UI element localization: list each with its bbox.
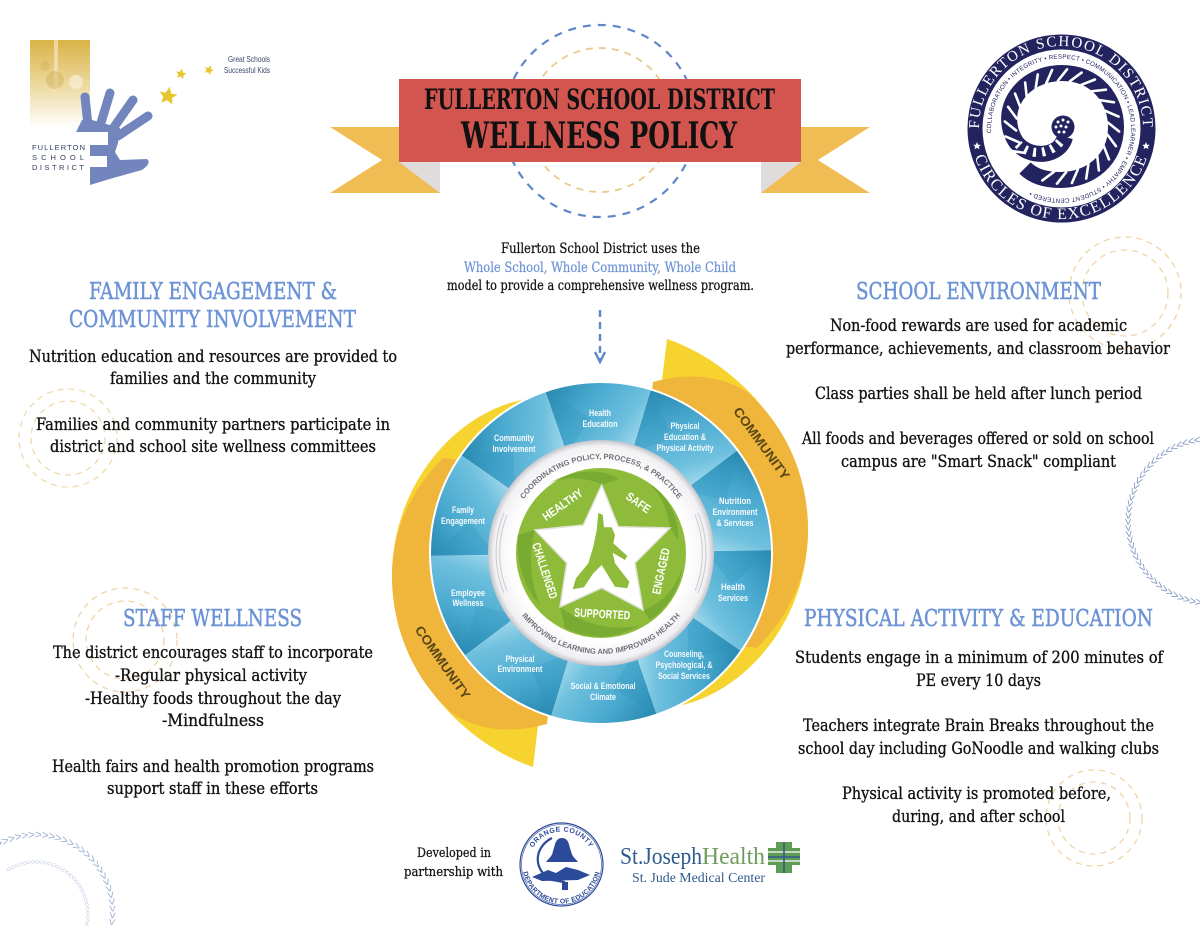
logo: Fullerton School District hand: [30, 40, 270, 185]
logo: St. Joseph Health St. Jude Medical Center: [620, 842, 800, 886]
decorative chevron arcs: >>>>>>>>>>>>>>>>>>>>>>>>>>>>>>: [6, 860, 90, 926]
green star medallion: HEALTHY: [540, 486, 586, 524]
text: staff wellness body: -Regular physical activity: [115, 666, 307, 686]
heading: school environment: SCHOOL ENVIRONMENT: [856, 279, 1102, 305]
chart: whole school whole community whole child wheel: [392, 339, 808, 767]
wheel segment labels: Community: [494, 433, 535, 444]
logo: Fullerton School District hand: DISTRICT: [32, 163, 84, 172]
wheel segment labels: Social Services: [658, 671, 710, 682]
panel: school environment: [786, 279, 1171, 472]
logo: Orange County Department of Education seal: ORANGE COUNTY: [530, 826, 594, 847]
text: family engagement body: [29, 347, 397, 457]
community label: lower left: COMMUNITY: [412, 623, 474, 702]
text: family engagement body: Families and community partners participate in: [36, 415, 390, 435]
partnership text: Developed in: [417, 846, 492, 861]
green star medallion: CHALLENGED: [529, 541, 560, 601]
wheel segment labels: Environment: [712, 507, 758, 518]
text: family engagement body: families and the community: [110, 369, 316, 389]
wheel segment labels: Health: [589, 408, 611, 419]
text: physical activity body: Physical activity is promoted before,: [842, 784, 1111, 804]
community swoosh: lower left: [392, 399, 560, 767]
wheel segment labels: Family: [452, 505, 475, 516]
white inner ring with curved captions: COORDINATING POLICY, PROCESS, & PRACTICE: [520, 454, 682, 500]
jumping figure: [573, 513, 629, 589]
wheel segment labels: Involvement: [492, 444, 536, 455]
panel: family engagement and community involvement: [29, 279, 397, 457]
logo: Circles of Excellence seal: FULLERTON SCHOOL DISTRICT: [969, 36, 1153, 128]
wheel segment labels: Environment: [498, 664, 543, 675]
text: school environment body: Class parties shall be held after lunch period: [815, 384, 1142, 404]
green star medallion: SUPPORTED: [574, 606, 631, 622]
wheel segment labels: Education: [582, 419, 618, 430]
text: school environment body: [786, 316, 1171, 472]
title line 1: FULLERTON SCHOOL DISTRICT: [424, 83, 775, 116]
logo: Fullerton School District hand: Successful Kids: [224, 65, 270, 75]
white inner ring with curved captions: [488, 440, 714, 666]
wheel segment labels: Education &: [664, 432, 706, 443]
green star medallion: SAFE: [623, 489, 653, 516]
text: staff wellness body: support staff in these efforts: [107, 779, 318, 799]
wheel segments: [420, 380, 782, 726]
logo: Fullerton School District hand: SCHOOL: [32, 153, 84, 162]
heading: family engagement: [69, 279, 357, 333]
wheel segment labels: Engagement: [441, 516, 486, 527]
wheel segment labels: [441, 408, 758, 703]
partnership text: [404, 846, 504, 880]
wheel segment labels: Employee: [451, 588, 485, 599]
partnership text: partnership with: [404, 865, 504, 880]
text: staff wellness body: The district encourages staff to incorporate: [53, 643, 373, 663]
heading: staff wellness: STAFF WELLNESS: [123, 606, 302, 632]
logo: Orange County Department of Education seal: [519, 822, 604, 907]
text: family engagement body: Nutrition education and resources are provided to: [29, 347, 397, 367]
intro text block: Whole School, Whole Community, Whole Child: [464, 260, 736, 276]
logo: Circles of Excellence seal: COLLABORATION • INTEGRITY • RESPECT • COMMUNICATION • LEAD LEARNER • EMPATHY • STUDENT CENTERED •: [986, 54, 1136, 203]
text: staff wellness body: [52, 643, 374, 799]
heading: family engagement: COMMUNITY INVOLVEMENT: [69, 307, 357, 333]
wheel segment labels: Physical: [506, 654, 534, 665]
text: family engagement body: district and school site wellness committees: [50, 437, 376, 457]
intro text block: [447, 241, 754, 294]
text: physical activity body: during, and after school: [892, 807, 1065, 827]
wheel segment labels: Psychological, &: [656, 660, 713, 671]
wheel segment labels: Physical Activity: [656, 443, 714, 454]
logo: Circles of Excellence seal: [968, 34, 1156, 222]
text: school environment body: Non-food rewards are used for academic: [830, 316, 1127, 336]
wheel segment labels: Counseling,: [664, 649, 704, 660]
heading: family engagement: FAMILY ENGAGEMENT &: [89, 279, 337, 305]
text: staff wellness body: Health fairs and health promotion programs: [52, 757, 374, 777]
wheel segment labels: Social & Emotional: [570, 681, 636, 692]
logo: Fullerton School District hand: Great Schools: [228, 54, 270, 64]
logo: St. Joseph Health St. Jude Medical Center: St. Jude Medical Center: [632, 871, 765, 886]
logo: St. Joseph Health St. Jude Medical Center: Health: [702, 844, 765, 870]
logo: Circles of Excellence seal: CIRCLES OF EXCELLENCE: [976, 155, 1146, 220]
title ribbon banner: [330, 79, 870, 193]
intro text block: Fullerton School District uses the: [501, 241, 700, 257]
green star medallion: ENGAGED: [649, 546, 673, 596]
text: school environment body: campus are "Smart Snack" compliant: [841, 452, 1116, 472]
wheel segment labels: Health: [721, 582, 745, 593]
text: staff wellness body: -Healthy foods throughout the day: [85, 689, 341, 709]
text: staff wellness body: -Mindfulness: [162, 711, 264, 731]
panel: staff wellness: [52, 606, 374, 799]
text: physical activity body: [795, 648, 1164, 827]
logo: Orange County Department of Education seal: DEPARTMENT OF EDUCATION: [523, 871, 600, 904]
intro text block: model to provide a comprehensive wellness program.: [447, 278, 754, 294]
wheel segment labels: Wellness: [452, 598, 484, 609]
wheel segment labels: Climate: [590, 692, 616, 703]
community label: upper right: COMMUNITY: [730, 404, 793, 483]
title line 2: WELLNESS POLICY: [460, 115, 738, 157]
wheel segment labels: Physical: [670, 421, 700, 432]
text: physical activity body: PE every 10 days: [916, 671, 1041, 691]
panel: physical activity and education: [795, 606, 1164, 827]
wheel segment labels: Services: [718, 593, 748, 604]
white inner ring with curved captions: IMPROVING LEARNING AND IMPROVING HEALTH: [522, 612, 680, 654]
logo: St. Joseph Health St. Jude Medical Center: St.Joseph: [620, 844, 702, 870]
community swoosh: upper right: [640, 339, 808, 707]
wheel segment labels: & Services: [716, 518, 754, 529]
wheel segment labels: Nutrition: [719, 496, 751, 507]
logo: Fullerton School District hand: FULLERTON: [32, 143, 85, 152]
arrow: dashed down arrow to wheel: [595, 310, 605, 362]
green star medallion: [516, 468, 686, 638]
